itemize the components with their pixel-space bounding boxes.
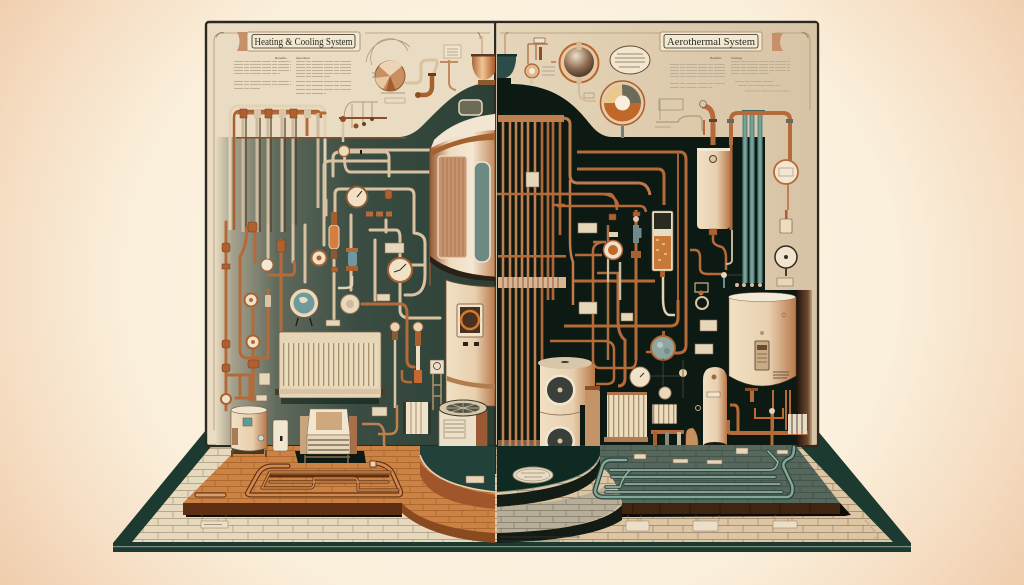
icon: hook fitting xyxy=(695,283,708,309)
pipe: right top elbow xyxy=(700,100,717,145)
panel: left dark wall section xyxy=(216,84,495,445)
fan unit: centre left xyxy=(439,400,487,470)
text block: right description: Savings xyxy=(731,56,743,60)
panel: back wall xyxy=(206,22,818,446)
valve assemblies: near boiler xyxy=(390,322,444,410)
gauge: round dial right of left section xyxy=(388,258,412,282)
gauge: right wall dial xyxy=(775,246,797,276)
title: left: Heating & Cooling System xyxy=(254,37,352,48)
boiler unit: small left xyxy=(231,406,267,457)
gauge: right orange dial xyxy=(604,240,622,260)
icon: metal ball gauge xyxy=(560,43,598,101)
radiator label xyxy=(372,407,387,416)
text block: right description xyxy=(670,56,790,91)
gauge: mid left dial xyxy=(346,186,392,214)
icon: orange filter tube xyxy=(329,212,339,272)
gauge: right wall label dial xyxy=(774,160,798,210)
label: left tags xyxy=(256,243,404,401)
pipes: left central network xyxy=(324,150,440,367)
boiler: large right xyxy=(728,292,796,386)
left circular dais xyxy=(420,446,495,509)
left top note callout xyxy=(440,45,461,90)
radiator: left panel xyxy=(275,332,385,404)
divider xyxy=(494,22,496,474)
dark shadow patches left xyxy=(232,446,366,463)
icon: colour dial xyxy=(600,81,644,138)
orange platform xyxy=(183,446,495,543)
valve stack: right centre xyxy=(609,212,641,258)
green brick slab right xyxy=(600,445,851,517)
pipe fittings: left column xyxy=(222,222,285,372)
gauge: teal mesh xyxy=(651,331,675,360)
icon: blue filter tube xyxy=(338,248,358,288)
gauge: pressure plate xyxy=(340,294,360,314)
radiator: small behind fan xyxy=(404,402,430,434)
left top pipe elbow xyxy=(406,60,437,98)
radiator: right small xyxy=(604,392,648,442)
pipes: right network xyxy=(545,152,686,386)
gauge: left small cluster xyxy=(221,250,326,404)
water heater: top right xyxy=(690,148,742,288)
box unit: small white xyxy=(273,420,288,451)
title: right: Aerothermal System xyxy=(667,37,755,48)
fan units: right stacked xyxy=(538,357,600,467)
text block: right description: Benefits xyxy=(710,56,722,60)
pipe run: AC to fan xyxy=(362,405,440,449)
icon: copper bowl left xyxy=(471,36,495,85)
floor marker left xyxy=(195,493,228,528)
right pipe schematic note xyxy=(655,99,704,135)
valve group: right base xyxy=(651,428,698,456)
panel: right dark wall section xyxy=(497,84,812,445)
pipes: left vertical network xyxy=(226,215,351,410)
floor labels right xyxy=(626,448,878,538)
grey paved curve right xyxy=(497,485,622,543)
pipes: under right boiler xyxy=(728,388,808,480)
floor coil: right xyxy=(595,447,794,497)
right wall side shadow xyxy=(796,290,812,445)
floor base xyxy=(113,430,911,552)
icon: wall switch box xyxy=(780,210,792,233)
text block: left description: Operation xyxy=(296,56,310,60)
icon: sectioned pie diagram xyxy=(366,39,410,103)
radiator: right mini xyxy=(652,404,677,424)
icon: small valve right top xyxy=(525,38,556,84)
title: left xyxy=(237,32,360,51)
boiler: lower body with window xyxy=(446,280,495,406)
radiator: tall right xyxy=(497,115,650,466)
text block: left description xyxy=(234,56,351,94)
gauge: large teal xyxy=(290,288,318,326)
top schematic valve: left xyxy=(338,102,387,156)
tank: tall white xyxy=(696,367,727,455)
text block: left description: Benefits xyxy=(275,56,287,60)
icon: orange filter jar xyxy=(652,211,673,277)
pipes: right teal bundle xyxy=(727,110,793,287)
boiler: upper drum xyxy=(430,100,495,281)
floor coil: left xyxy=(248,461,401,495)
gauge: small right dials xyxy=(630,358,687,399)
pipes: left manifold xyxy=(230,106,406,232)
icon: teal bowl right xyxy=(497,34,517,84)
right circular dais xyxy=(497,446,601,507)
title: right xyxy=(660,32,783,51)
label: right tags xyxy=(578,223,793,354)
callout: oval note xyxy=(610,46,650,74)
AC unit xyxy=(300,409,357,463)
